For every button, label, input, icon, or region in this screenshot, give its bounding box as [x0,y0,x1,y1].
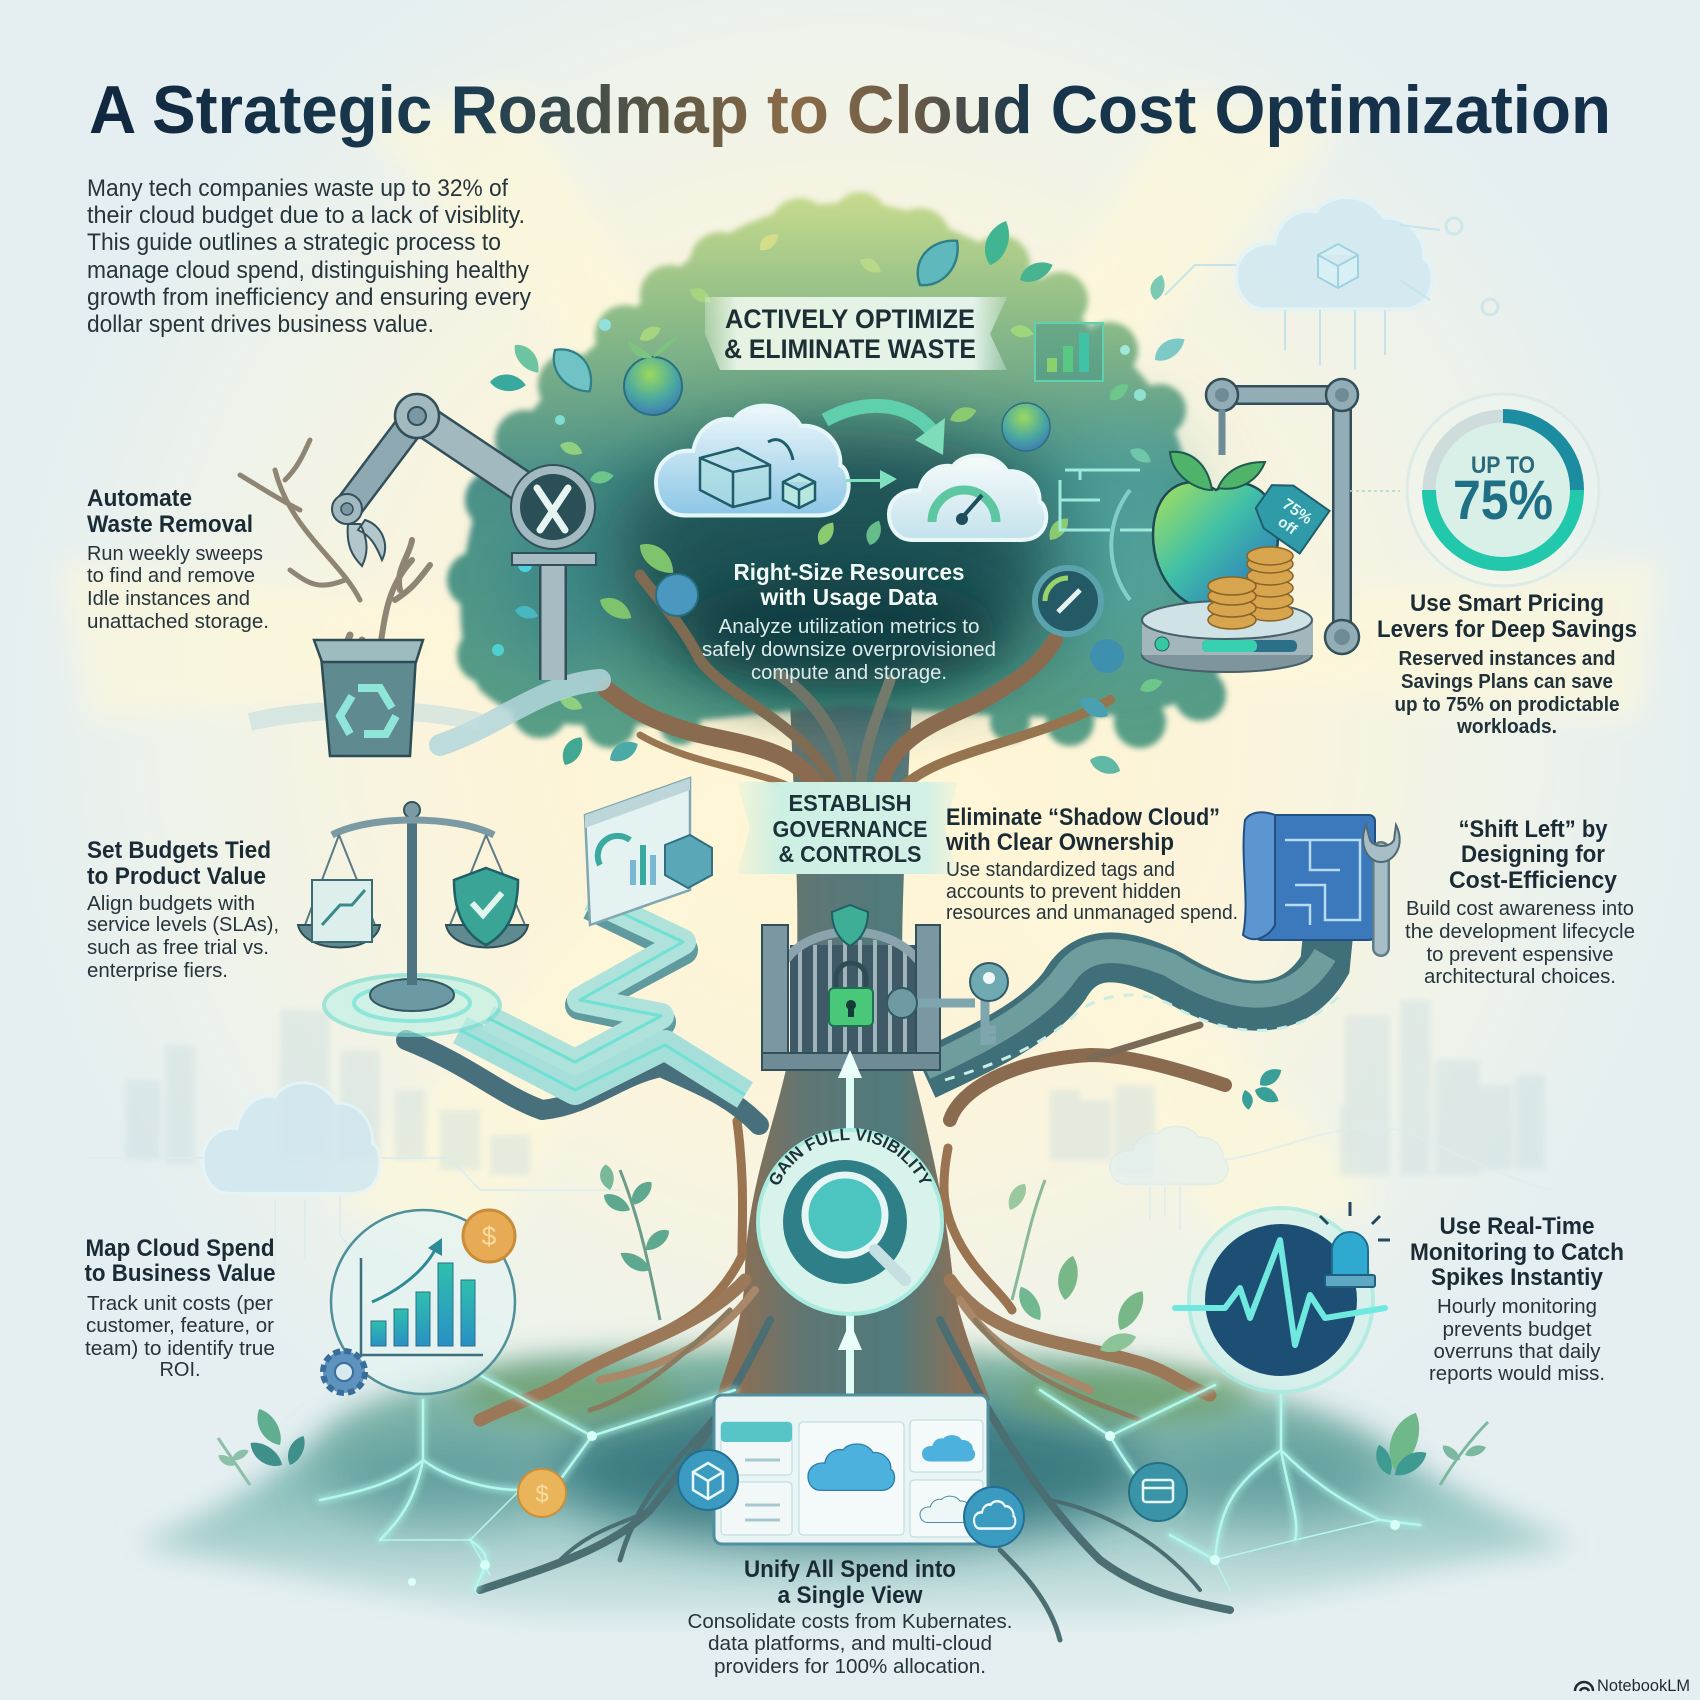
straight arrow [846,470,897,489]
price tag [1249,475,1329,554]
text: unify spend [688,1556,1012,1678]
text: real-time monitoring: overruns that daily [1434,1341,1600,1363]
text: real-time monitoring [1410,1213,1624,1385]
text: set budgets [87,837,279,982]
price tag: 75% [1279,496,1315,528]
text: set budgets: Align budgets with [87,893,255,915]
apple and frame [1111,379,1359,654]
small plants [216,1163,1488,1485]
text: automate waste removal: Idle instances and [87,588,250,610]
intro text: dollar spent drives business value. [87,311,434,338]
text: eliminate shadow cloud: with Clear Ownership [945,829,1174,856]
text: eliminate shadow cloud: Eliminate “Shadow Cloud” [946,804,1220,831]
curved arrow [825,406,945,455]
intro text: This guide outlines a strategic process to [87,229,501,256]
text: smart pricing [1377,590,1637,738]
icon: card badge [1129,1463,1187,1521]
text: eliminate shadow cloud: resources and unmanaged spend. [946,902,1238,924]
banner: establish governance: GOVERNANCE [772,816,928,842]
banner: actively optimize: ACTIVELY OPTIMIZE [725,304,975,334]
robotic arm [332,394,600,745]
blueprint and wrench [1243,812,1400,948]
banner: establish governance [737,782,958,874]
text: real-time monitoring: Monitoring to Catch [1410,1239,1624,1266]
central glow line with arrows [838,1050,862,1400]
icon: cube badge [678,1450,738,1510]
text: map cloud spend: Track unit costs (per [87,1293,273,1315]
banner: establish governance: ESTABLISH [788,790,912,816]
text: set budgets: service levels (SLAs), [87,914,279,936]
text: unify spend: providers for 100% allocation. [714,1656,986,1678]
text: right-size resources: Right-Size Resources [734,559,964,585]
icon: lower coin: $ [535,1481,549,1508]
text: smart pricing: Savings Plans can save [1401,671,1613,693]
gauge: up to 75%: UP TO [1471,452,1535,479]
text: set budgets: enterprise fiers. [87,960,228,982]
text: smart pricing: Reserved instances and [1398,648,1616,670]
price tag: off [1275,513,1301,539]
icon: cloud badge [964,1487,1024,1547]
notebooklm mark: NotebookLM [1597,1677,1690,1695]
banner: establish governance: & CONTROLS [778,841,922,867]
balance scale [298,802,528,1035]
text: right-size resources: safely downsize overprovisioned [702,639,996,661]
tree trunk [650,700,1012,1400]
cloud: gauge [889,456,1046,540]
text: automate waste removal: Waste Removal [87,511,253,538]
cloud top right [1165,197,1498,370]
text: real-time monitoring: reports would miss. [1429,1363,1605,1385]
alert beacon [1320,1202,1390,1287]
text: right-size resources: compute and storage. [751,662,947,684]
text: automate waste removal: Automate [87,485,192,512]
gain full visibility emblem [756,1128,944,1316]
tree roots [480,1280,1230,1640]
icon: upper coin [463,1210,515,1262]
governance gate [762,905,940,1070]
text: smart pricing: up to 75% on prodictable [1394,694,1620,716]
intro text: Many tech companies waste up to 32% of [87,175,508,202]
dead branches [240,440,430,660]
intro text: their cloud budget due to a lack of visiblity. [87,202,525,229]
right branch [950,1025,1285,1120]
text: map cloud spend: to Business Value [84,1260,276,1287]
text: map cloud spend [84,1235,276,1381]
key [887,963,1008,1045]
text: shift left: Cost-Efficiency [1449,867,1618,894]
ground [135,1348,1575,1620]
text: map cloud spend: ROI. [159,1359,201,1381]
canopy gauge [1035,568,1101,634]
text: shift left: the development lifecycle [1405,921,1635,943]
text: real-time monitoring: Hourly monitoring [1437,1296,1597,1318]
text: eliminate shadow cloud: accounts to prevent hidden [946,881,1181,903]
intro text: growth from inefficiency and ensuring every [87,284,531,311]
tree canopy [447,192,1226,748]
text: right-size resources: Analyze utilization metrics to [718,616,980,638]
gauge: up to 75%: 75% [1453,468,1553,531]
tree branches [607,575,1110,800]
text: map cloud spend: customer, feature, or [86,1315,274,1337]
text: shift left: Build cost awareness into [1406,898,1634,920]
canopy leaves [489,217,1189,778]
text: real-time monitoring: Spikes Instantiy [1431,1264,1604,1291]
faint cloud left [90,1083,620,1270]
text: right-size resources: with Usage Data [760,584,938,610]
text: automate waste removal: unattached storage. [87,611,269,633]
text: set budgets: Set Budgets Tied [87,837,271,864]
text: real-time monitoring: prevents budget [1442,1319,1592,1341]
text: eliminate shadow cloud: Use standardized tags and [946,859,1175,881]
text: unify spend: Consolidate costs from Kubernates. [688,1611,1012,1633]
real-time monitor [1175,1208,1385,1392]
text: automate waste removal [87,485,269,633]
text: smart pricing: Levers for Deep Savings [1377,616,1637,643]
text: shift left: Designing for [1461,841,1605,868]
glowing root network [320,1375,1420,1590]
text: smart pricing: workloads. [1456,716,1557,738]
text: unify spend: a Single View [778,1582,923,1609]
text: shift left: “Shift Left” by [1458,816,1608,843]
zigzag data path and left branch [406,898,759,1125]
title: A Strategic Roadmap to Cloud Cost Optimization [89,72,1611,148]
bubble chart [323,1210,515,1394]
text: real-time monitoring: Use Real-Time [1440,1213,1594,1240]
gain full visibility emblem: GAIN FULL VISIBILITY [770,1128,932,1184]
canopy chart icon [1035,323,1103,381]
text: map cloud spend: team) to identify true [85,1338,275,1360]
text: eliminate shadow cloud [945,804,1238,924]
icon: upper coin: $ [482,1221,497,1251]
text: unify spend: data platforms, and multi-cloud [708,1633,992,1655]
text: shift left: architectural choices. [1424,966,1616,988]
text: map cloud spend: Map Cloud Spend [86,1235,274,1262]
coin stack [1208,547,1293,629]
pedestal [1142,601,1313,672]
text: automate waste removal: to find and remove [87,565,255,587]
canopy circuit lines [1060,470,1180,530]
text: smart pricing: Use Smart Pricing [1410,590,1604,617]
text: automate waste removal: Run weekly sweeps [87,543,263,565]
text: set budgets: to Product Value [87,863,266,890]
faint skyline [125,1000,1545,1175]
intro text: manage cloud spend, distinguishing healthy [87,257,529,284]
shift left ribbon [925,935,1345,1080]
intro text [87,175,531,338]
banner: actively optimize [705,297,1007,370]
cloud: oversized box [656,406,849,515]
text: shift left [1405,816,1635,988]
text: unify spend: Unify All Spend into [744,1556,956,1583]
central dashboard [714,1395,988,1544]
recycling bin [250,640,480,756]
text: right-size resources [702,559,996,684]
text: set budgets: such as free trial vs. [87,937,269,959]
gauge: up to 75% [1350,394,1599,586]
banner: actively optimize: & ELIMINATE WASTE [724,334,976,364]
faint cloud right [1110,1126,1550,1230]
dashboard panel [585,778,712,925]
icon: lower coin [518,1469,566,1517]
text: shift left: to prevent espensive [1426,944,1614,966]
